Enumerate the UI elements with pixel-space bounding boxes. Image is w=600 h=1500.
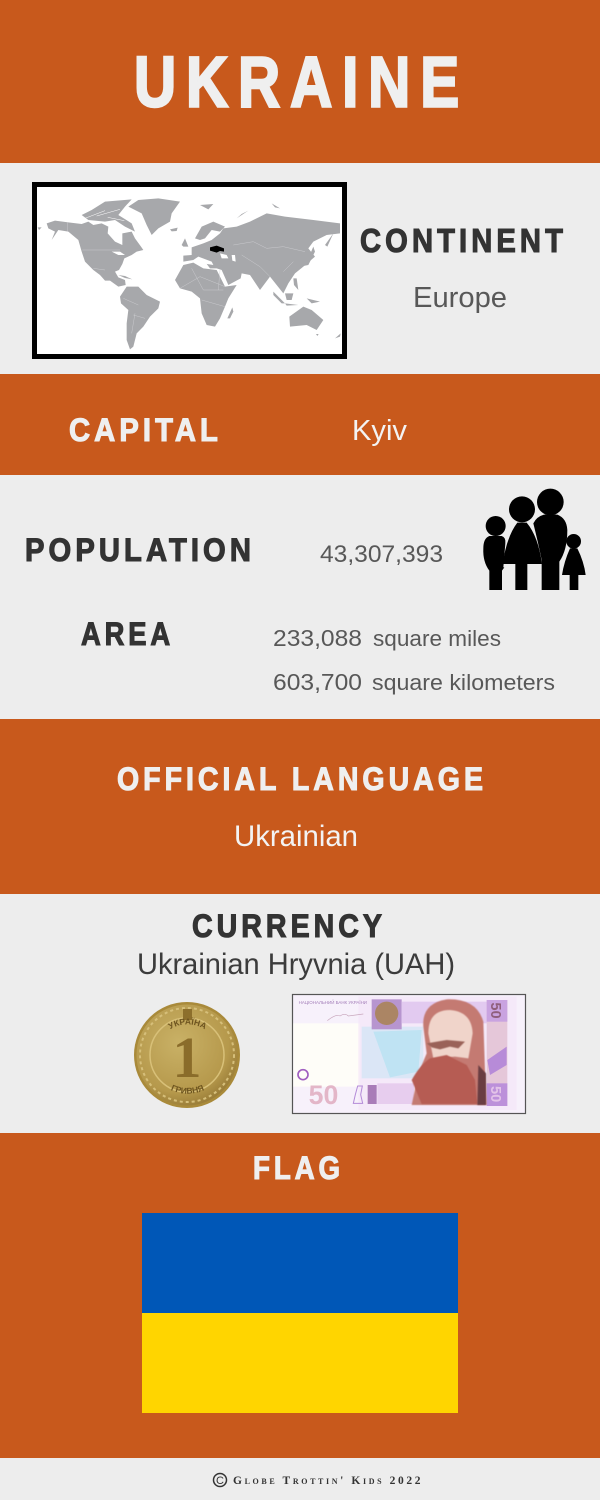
- panel: official language: [0, 719, 600, 894]
- panel: title banner: [0, 0, 600, 163]
- currency value: Ukrainian Hryvnia (UAH): [137, 948, 455, 981]
- area in square kilometers: square kilometers: [372, 670, 555, 695]
- panel: flag: [0, 1133, 600, 1458]
- icon: coin: ГРИВНЯ: [171, 1084, 204, 1094]
- population value: 43,307,393: [320, 541, 443, 568]
- continent value: Europe: [413, 282, 507, 314]
- flag heading: FLAG: [253, 1150, 344, 1186]
- icon: 50 hryvnia banknote: 50: [309, 1080, 338, 1110]
- credit text: Globe Trottin' Kids 2022: [233, 1475, 423, 1487]
- panel: currency: [134, 908, 526, 1114]
- icon: 50 hryvnia banknote: НАЦІОНАЛЬНИЙ БАНК УКРАЇНИ: [299, 998, 367, 1005]
- area in square kilometers: 603,700: [273, 669, 362, 695]
- icon: 50 hryvnia banknote: 50: [487, 1002, 503, 1019]
- footer credit: [0, 1458, 600, 1500]
- icon: copyright: C: [216, 1475, 224, 1487]
- continent heading: CONTINENT: [360, 222, 567, 259]
- area in square miles: square miles: [373, 626, 501, 651]
- title: UKRAINE: [134, 44, 469, 122]
- icon: coin: 1: [172, 1025, 202, 1090]
- icon: coin: [134, 1002, 240, 1108]
- icon: 50 hryvnia banknote: 50: [487, 1086, 503, 1102]
- capital heading: CAPITAL: [69, 412, 222, 448]
- area heading: AREA: [81, 616, 174, 652]
- area in square kilometers: [273, 669, 555, 695]
- panel: continent: [0, 163, 600, 374]
- icon: Ukraine highlighted on map: [210, 246, 224, 253]
- panel: population and area: [0, 475, 600, 719]
- flag of Ukraine: [142, 1213, 458, 1413]
- world map: [34, 184, 344, 356]
- area in square miles: 233,088: [273, 625, 362, 651]
- area in square miles: [273, 625, 501, 651]
- capital value: Kyiv: [352, 415, 407, 447]
- language value: Ukrainian: [234, 820, 358, 853]
- currency heading: CURRENCY: [192, 908, 386, 944]
- icon: 50 hryvnia banknote: [292, 994, 526, 1114]
- icon: copyright: [214, 1474, 226, 1487]
- panel: capital: [0, 374, 600, 475]
- language heading: OFFICIAL LANGUAGE: [117, 761, 487, 797]
- population heading: POPULATION: [25, 532, 255, 568]
- portrait: [412, 999, 487, 1105]
- icon: coin: УКРАЇНА: [168, 1017, 206, 1030]
- icon: family: [483, 489, 586, 590]
